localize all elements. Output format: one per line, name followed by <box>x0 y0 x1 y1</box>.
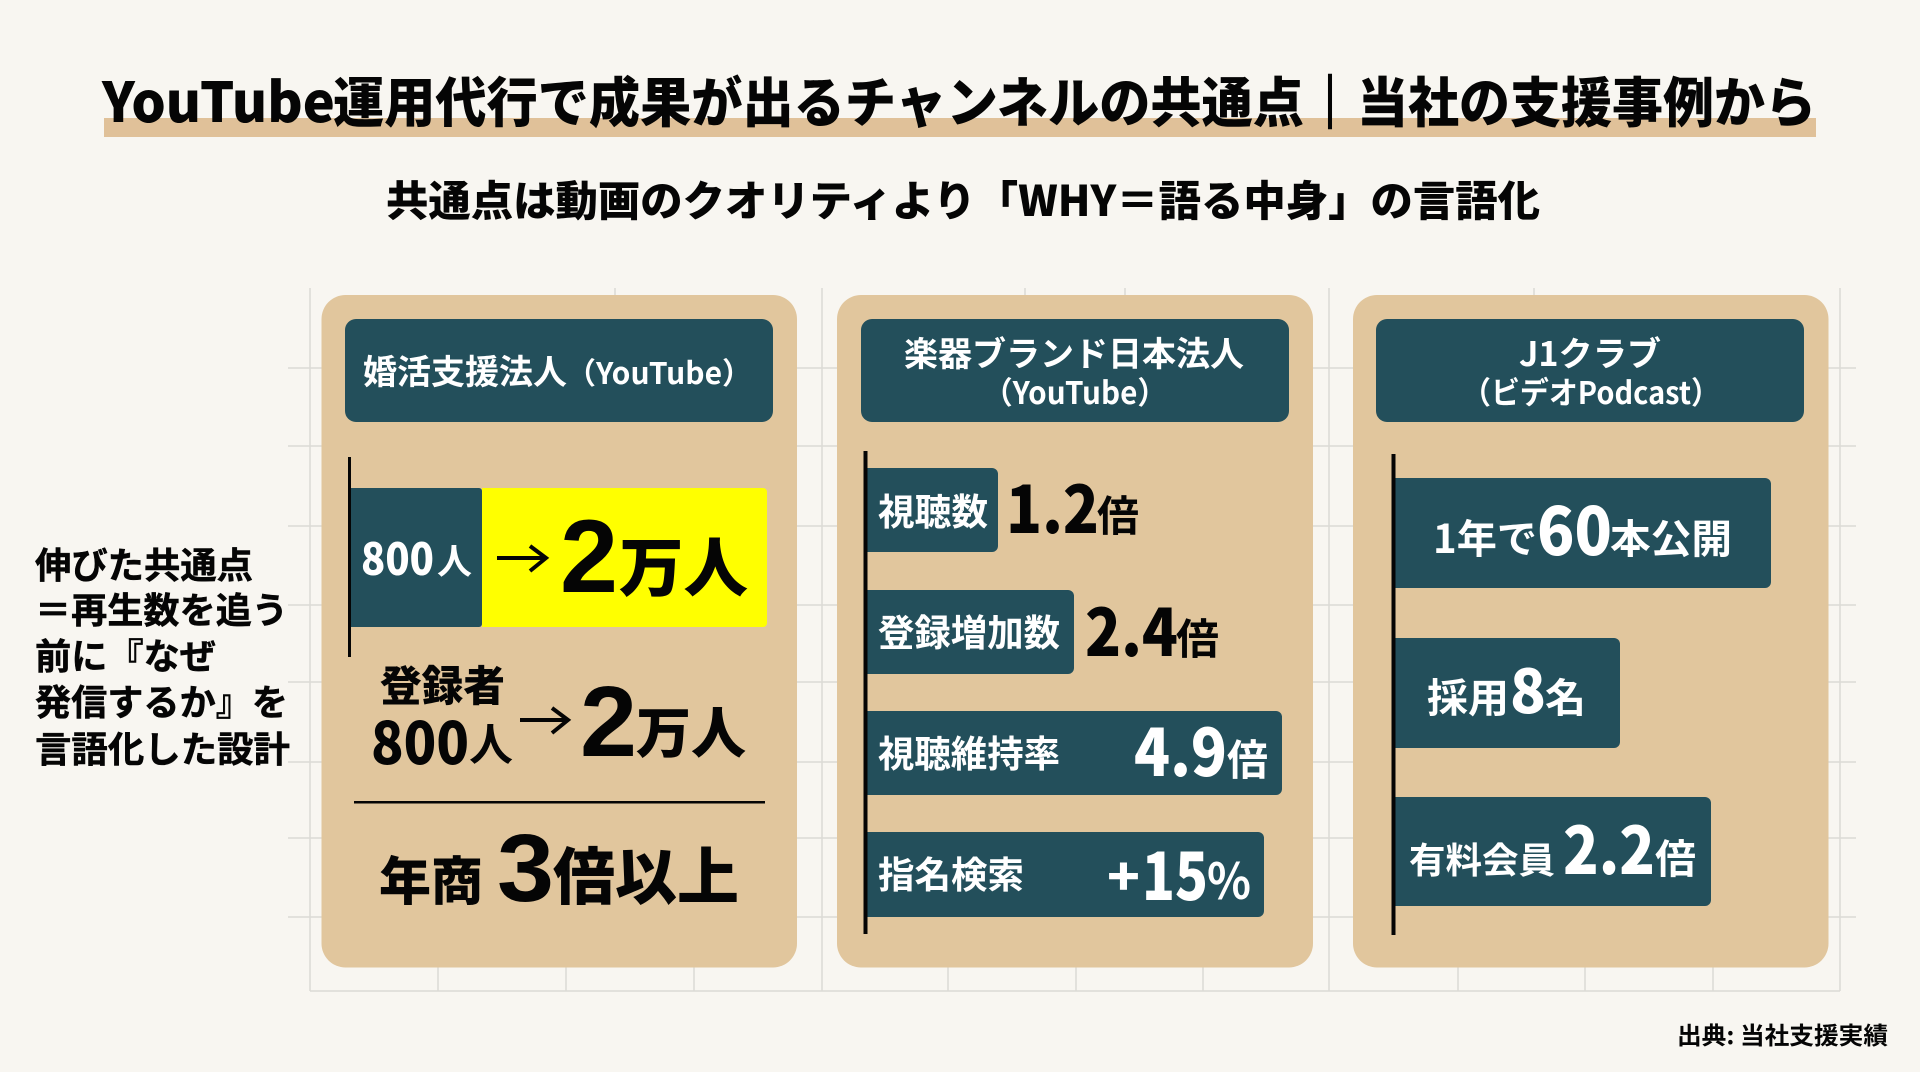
bar: 採用8名: 採用 <box>1427 666 1509 724</box>
vertical axis <box>348 457 351 657</box>
bar: 採用8名: 8 <box>1510 644 1546 731</box>
bar: 有料会員2.2倍 <box>1395 797 1711 906</box>
bar: 指名検索: % <box>1207 842 1251 914</box>
left side note: ＝再生数を追う <box>35 582 288 634</box>
left side note: 伸びた共通点 <box>35 537 253 589</box>
bar: 1年で60本公開: 60 <box>1537 479 1612 575</box>
bar: 視聴数: 倍 <box>1097 483 1139 544</box>
panel header: 婚活支援法人 <box>363 345 567 394</box>
metric: subscribers: 万人 <box>636 689 746 769</box>
panel header: （YouTube） <box>983 368 1167 413</box>
bar: 指名検索: + <box>1107 838 1140 910</box>
subtitle: 共通点は動画のクオリティより「WHY＝語る中身」の言語化 <box>386 168 1540 229</box>
bar: 視聴維持率 <box>867 701 1282 795</box>
bar: 1年で60本公開 <box>1395 478 1771 588</box>
bar: 採用8名: 名 <box>1545 666 1586 724</box>
panel header: （ビデオPodcast） <box>1462 368 1720 413</box>
title with highlight underline: 運用代行で成果が出るチャンネルの共通点 <box>333 59 1304 138</box>
title with highlight underline: YouTube <box>101 58 335 138</box>
bar: 登録増加数: 登録増加数 <box>878 603 1060 657</box>
bar: 指名検索 <box>867 825 1264 919</box>
panel header: 楽器ブランド日本法人 <box>904 327 1244 376</box>
bar: 登録増加数: 2.4 <box>1085 581 1178 675</box>
metric: subscribers: 800 <box>371 697 469 781</box>
title with highlight underline <box>101 58 1816 138</box>
metric: subscribers: 人 <box>469 709 513 773</box>
left side note: 発信するか』を <box>35 674 288 726</box>
left side note <box>35 537 290 773</box>
metric: annual revenue: 年商 <box>379 840 483 915</box>
metric: annual revenue: 3 <box>497 815 554 922</box>
title with highlight underline: ｜ <box>1304 59 1356 138</box>
vertical axis <box>1392 454 1396 935</box>
highlighted bar: 800人 to 2万人 <box>350 488 767 627</box>
bar: 有料会員2.2倍: 有料会員 <box>1409 832 1555 884</box>
bar: 登録増加数: 倍 <box>1176 606 1219 667</box>
bar: 登録増加数 <box>867 581 1219 675</box>
bar: 採用8名 <box>1395 638 1620 748</box>
bar: 1年で60本公開: 本公開 <box>1610 507 1732 565</box>
bar: 指名検索: 15 <box>1142 825 1208 919</box>
panel: 楽器ブランド日本法人 <box>837 295 1313 968</box>
bar: 有料会員2.2倍: 倍 <box>1655 827 1696 885</box>
panel header: （YouTube） <box>566 349 752 393</box>
panel header <box>861 319 1289 422</box>
metric: subscribers: 登録者 <box>380 653 505 714</box>
left side note: 前に『なぜ <box>35 628 216 680</box>
bar: 1年で60本公開: 1年で <box>1433 507 1537 565</box>
panel header: J1クラブ <box>1519 327 1661 376</box>
bar: 指名検索: 指名検索 <box>878 845 1024 899</box>
bar: 視聴数 <box>867 458 1139 552</box>
panel: 婚活支援法人 <box>322 295 797 968</box>
title with highlight underline: 当社の支援事例から <box>1357 59 1816 138</box>
panel header <box>1376 319 1804 422</box>
vertical axis <box>864 451 868 934</box>
metric: annual revenue: 倍以上 <box>553 827 739 917</box>
highlighted bar: 800人 to 2万人: 2 <box>560 499 618 615</box>
bar: 視聴数: 視聴数 <box>878 482 988 536</box>
bar: 視聴数: 1.2 <box>1006 458 1099 552</box>
metric: subscribers <box>371 653 746 781</box>
highlighted bar: 800人 to 2万人: 人 <box>437 534 472 585</box>
left side note: 言語化した設計 <box>35 721 290 773</box>
highlighted bar: 800人 to 2万人: 800 <box>361 524 434 588</box>
source note: 出典: 当社支援実績 <box>1677 1016 1888 1051</box>
panel: J1クラブ <box>1353 295 1828 968</box>
bar: 視聴維持率: 倍 <box>1227 727 1268 788</box>
metric: subscribers: 2 <box>580 666 637 778</box>
metric: annual revenue <box>379 815 739 922</box>
bar: 有料会員2.2倍: 2.2 <box>1563 799 1655 893</box>
bar: 視聴維持率: 視聴維持率 <box>878 724 1060 778</box>
bar: 視聴維持率: 4.9 <box>1134 701 1227 795</box>
panel header <box>345 319 773 422</box>
highlighted bar: 800人 to 2万人: 万人 <box>619 518 748 610</box>
